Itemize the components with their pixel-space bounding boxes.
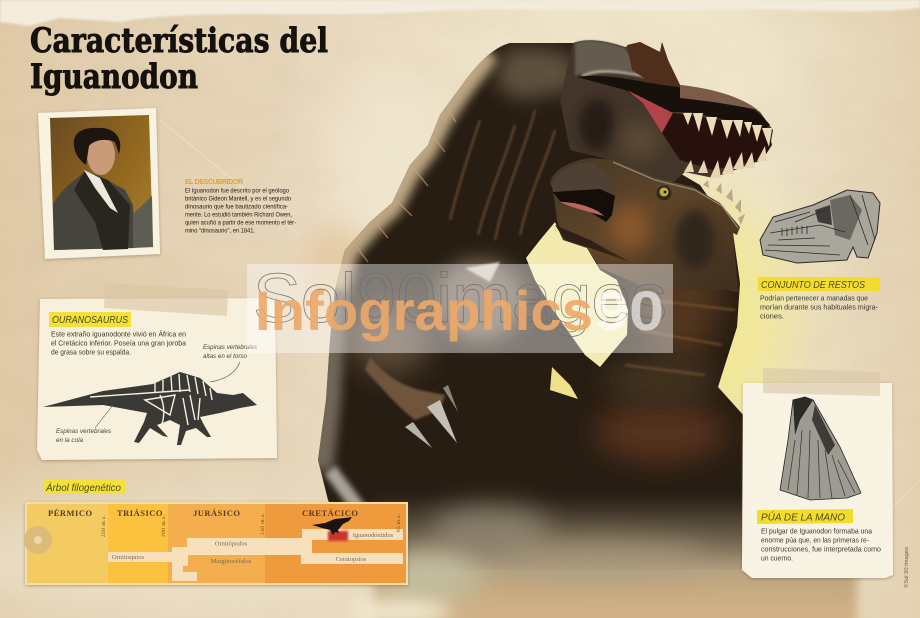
label highlight bbox=[49, 312, 131, 327]
neck spines bbox=[703, 180, 745, 225]
yellow gap below the arm bbox=[550, 367, 578, 399]
watermark: 90 bbox=[594, 279, 664, 342]
group names: Ornitópodos bbox=[215, 540, 248, 548]
coat bbox=[53, 172, 135, 250]
description: El pulgar de Iguanodon formaba una bbox=[761, 528, 872, 536]
hair bbox=[74, 128, 120, 165]
skull drawing bbox=[760, 190, 880, 263]
description: ciones. bbox=[760, 314, 784, 320]
skeleton drawing bbox=[43, 372, 257, 445]
callout: tail spines: Espinas vertebrales bbox=[56, 428, 111, 435]
eye bbox=[656, 186, 672, 200]
callout: dorsal spines bbox=[203, 344, 257, 382]
description: el Cretácico inferior. Poseía una gran joroba bbox=[51, 340, 186, 348]
text block: discoverer: quien acuñó a partir de ese momento el tér- bbox=[185, 220, 296, 226]
period ages: 250 m.a. bbox=[101, 514, 107, 537]
period ages bbox=[101, 512, 402, 537]
group names bbox=[112, 532, 394, 565]
group names: Marginocéfalos bbox=[211, 558, 252, 565]
text block: discoverer: mente. Lo estudió también Richard Owen, bbox=[185, 212, 292, 218]
shirt bbox=[84, 170, 118, 213]
description: Podrían pertenecer a manadas que bbox=[760, 296, 868, 302]
timeline disc bbox=[24, 526, 52, 554]
upper teeth bbox=[683, 113, 772, 147]
geological periods bbox=[27, 504, 406, 583]
dust cloud bbox=[350, 495, 857, 618]
description bbox=[761, 528, 881, 562]
face bbox=[87, 135, 115, 175]
lapel bbox=[74, 172, 130, 250]
label: PÚA DE LA MANO bbox=[761, 510, 845, 524]
period ages: 200 m.a. bbox=[161, 514, 167, 537]
callout: tail spines: en la cola bbox=[56, 437, 84, 444]
text block: group of remains bbox=[758, 277, 880, 320]
period ages: 65 m.a. bbox=[396, 513, 402, 532]
tree branches bbox=[108, 529, 403, 581]
description: un cuerno. bbox=[761, 556, 793, 562]
callout: dorsal spines: Espinas vertebrales bbox=[203, 344, 257, 351]
iguanodon silhouette bbox=[312, 517, 352, 535]
panel: hand spike bbox=[742, 368, 893, 578]
text block: discoverer: dinosaurio que fue bautizado científica- bbox=[185, 204, 288, 210]
title bbox=[30, 21, 328, 97]
period names: JURÁSICO bbox=[193, 508, 240, 518]
text block: discoverer: británico Gideon Mantell, y es el segundo bbox=[185, 196, 292, 202]
description bbox=[51, 330, 186, 356]
title: Características del bbox=[30, 21, 328, 61]
description: construcciones, fue interpretada como bbox=[761, 546, 881, 554]
tape bbox=[104, 283, 228, 316]
watermark: Sol90images bbox=[253, 259, 667, 337]
panel: Ouranosaurus bbox=[37, 283, 277, 460]
period ages: 146 m.a. bbox=[260, 512, 266, 535]
heading: phylogenetic tree: Árbol filogenético bbox=[45, 481, 121, 494]
period names bbox=[48, 508, 358, 518]
group names: Iguanodóntidos bbox=[353, 532, 394, 539]
period names: TRIÁSICO bbox=[117, 508, 163, 518]
callout: dorsal spines: altas en el torso bbox=[203, 353, 248, 360]
yellow gap between the animals bbox=[526, 222, 628, 367]
spike drawing bbox=[780, 397, 861, 500]
group names: Ceratopsios bbox=[336, 556, 367, 563]
description bbox=[760, 296, 879, 320]
Tyrannosaurus head bbox=[560, 40, 773, 185]
period names: PÉRMICO bbox=[48, 508, 93, 518]
body shading and fur bbox=[320, 48, 738, 510]
description: Este extraño iguanodonte vivió en África en bbox=[51, 330, 186, 338]
label highlight bbox=[758, 277, 880, 291]
gums bbox=[627, 90, 673, 133]
period names: CRETÁCICO bbox=[302, 508, 358, 518]
label highlight bbox=[757, 509, 853, 524]
copyright: ©Sol 90 Images bbox=[903, 546, 910, 588]
illustration: Tyrannosaurus attacking Iguanodon bbox=[318, 40, 857, 618]
description: morían durante sus habituales migra- bbox=[760, 304, 879, 312]
lower teeth bbox=[684, 146, 767, 178]
Iguanodon head bbox=[550, 158, 745, 290]
text block: discoverer: mino "dinosaurio", en 1841. bbox=[185, 228, 255, 234]
iguanodon mouth bbox=[553, 189, 615, 222]
chart: phylogenetic timeline bbox=[24, 502, 408, 585]
watermark: Infographics bbox=[255, 279, 593, 342]
description: enorme púa que, en las primeras re- bbox=[761, 538, 870, 544]
red blood mark bbox=[328, 531, 348, 541]
portrait card: Gideon Mantell bbox=[38, 108, 160, 259]
callout: tail spines bbox=[56, 405, 113, 444]
description: de grasa sobre su espalda. bbox=[51, 350, 131, 356]
mouth interior bbox=[662, 113, 772, 170]
tape bbox=[763, 368, 880, 396]
tongue bbox=[560, 202, 604, 216]
label: OURANOSAURUS bbox=[52, 315, 128, 326]
text block: discoverer: EL DESCUBRIDOR bbox=[185, 179, 243, 186]
group names: Ornitisquios bbox=[112, 554, 145, 561]
forearm and claws bbox=[365, 357, 458, 448]
label: CONJUNTO DE RESTOS bbox=[761, 280, 865, 291]
second figure bbox=[133, 196, 153, 248]
title: Iguanodon bbox=[30, 57, 198, 97]
text block: discoverer: El Iguanodon fue descrito por el geólogo bbox=[185, 188, 290, 194]
text block: discoverer bbox=[185, 179, 296, 234]
dinosaur body silhouette bbox=[318, 43, 745, 570]
portrait background bbox=[50, 115, 153, 250]
